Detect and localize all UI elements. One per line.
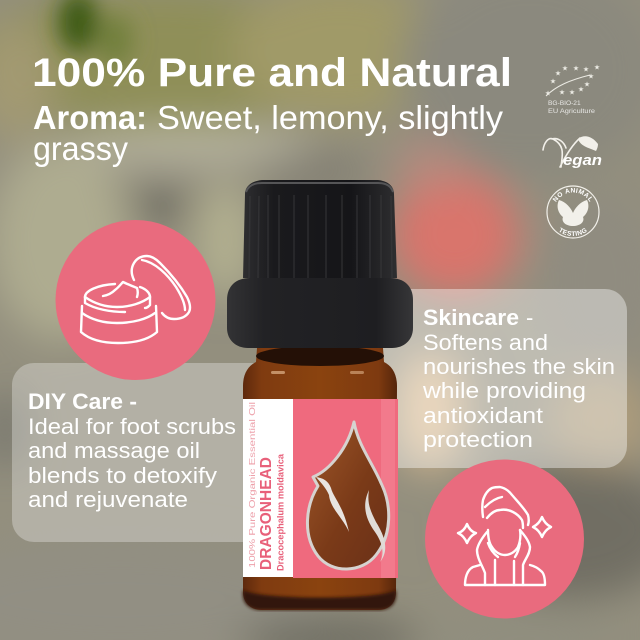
badge: EU organic leaf: ★	[583, 66, 589, 74]
label	[243, 399, 398, 578]
text: Skincare: while providing	[422, 378, 586, 403]
badge: EU organic leaf: ★	[573, 64, 579, 72]
badge: EU organic leaf: ★	[588, 72, 594, 80]
text: DIY Care	[28, 389, 236, 512]
badge: EU organic leaf: ★	[584, 80, 590, 88]
badge: no animal testing: NO ANIMAL	[552, 188, 592, 202]
glass body	[243, 346, 397, 610]
icon circle: cream jar	[56, 220, 216, 380]
text: Skincare: protection	[423, 427, 533, 452]
aroma line	[33, 99, 504, 167]
badge: EU organic leaf: ★	[550, 78, 556, 86]
badge: no animal testing	[546, 185, 600, 239]
ribbed upper cap	[243, 180, 397, 278]
badge: EU organic leaf: ★	[555, 70, 561, 78]
aroma line: Aroma:	[33, 99, 147, 136]
aroma line: Sweet, lemony, slightly	[157, 99, 504, 136]
panel: Skincare backing	[350, 289, 627, 468]
badge: vegan: egan	[563, 152, 602, 169]
badge: EU organic leaf: ★	[562, 64, 568, 72]
badge: EU organic leaf: ★	[545, 90, 551, 98]
badge: EU organic leaf: ★	[594, 64, 600, 72]
text: Skincare: nourishes the skin	[423, 354, 615, 379]
drop emblem	[307, 422, 389, 569]
bottle	[243, 346, 398, 610]
badge: EU organic leaf	[545, 64, 600, 115]
text: DIY Care: Ideal for foot scrubs	[28, 414, 236, 439]
badge: vegan	[543, 136, 602, 169]
text: DIY Care: blends to detoxify	[28, 463, 217, 488]
dropper cap	[227, 180, 413, 348]
badge: EU organic leaf: ★	[569, 88, 575, 96]
badge: no animal testing: TESTING	[560, 227, 587, 236]
text: DIY Care: and massage oil	[28, 438, 200, 463]
panel: DIY Care backing	[12, 363, 302, 542]
text: DIY Care: DIY Care -	[28, 389, 137, 414]
label: 100% Pure Organic Essential Oil	[247, 402, 257, 568]
badge: EU organic leaf: BG-BIO-21	[548, 100, 581, 107]
label: Dracocephalum moldavica	[276, 453, 286, 571]
label: DRAGONHEAD	[258, 457, 275, 570]
icon: cream jar	[81, 256, 190, 343]
text: Skincare: antioxidant	[423, 403, 543, 428]
title: 100% Pure and Natural	[32, 51, 512, 95]
icon: woman with towel	[458, 487, 551, 585]
text: Skincare: Softens and	[423, 330, 548, 355]
badge: EU organic leaf: EU Agriculture	[548, 108, 595, 115]
tamper collar	[227, 278, 413, 348]
aroma line: grassy	[33, 130, 128, 167]
icon: rabbit	[558, 200, 588, 226]
text: Skincare	[422, 305, 615, 452]
text: DIY Care: and rejuvenate	[28, 487, 188, 512]
icon circle: face care	[425, 460, 584, 618]
badge: EU organic leaf: ★	[559, 88, 565, 96]
text: Skincare: Skincare	[423, 305, 519, 330]
text: Skincare: -	[526, 305, 533, 330]
badge: EU organic leaf: ★	[578, 86, 584, 94]
